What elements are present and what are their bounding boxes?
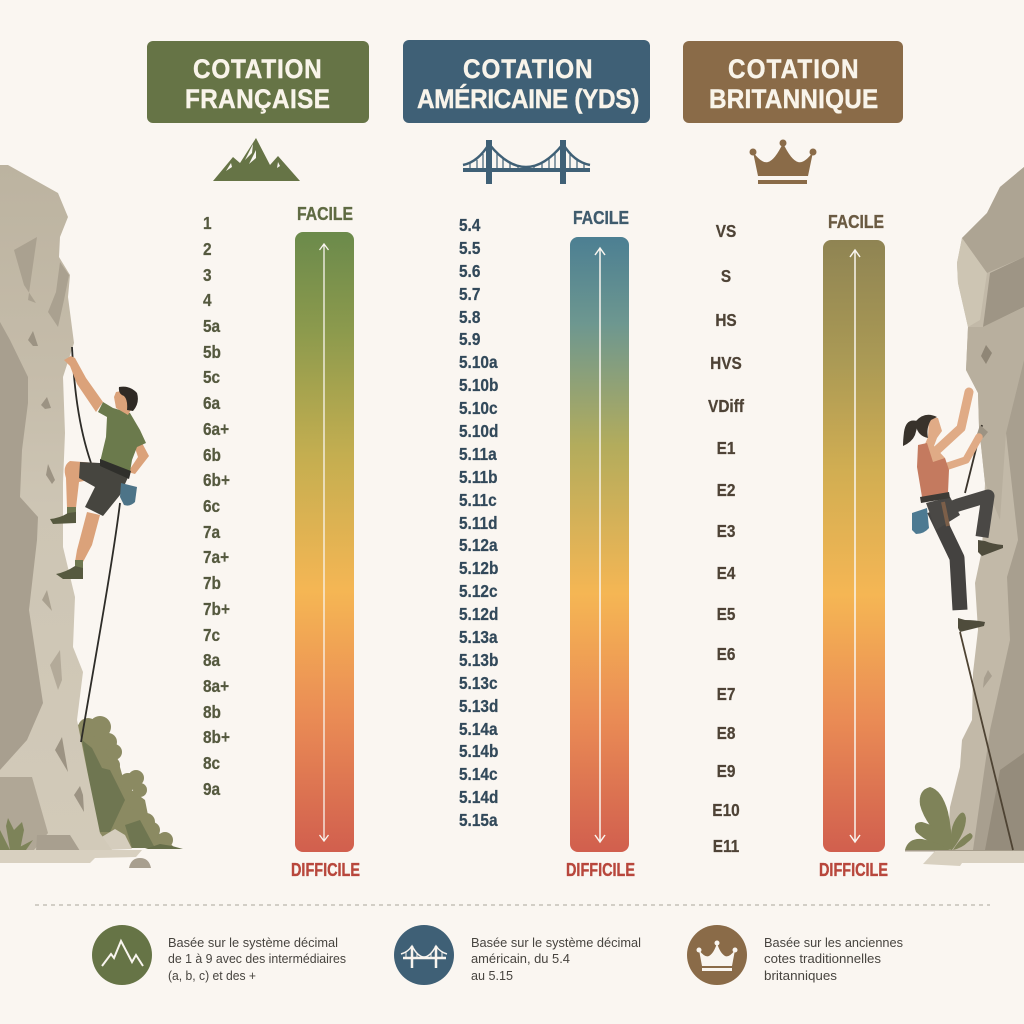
column: british grades: E7 — [717, 685, 735, 704]
column: french grades: 3 — [203, 266, 212, 285]
text: french note — [168, 935, 346, 983]
icon: mountain badge — [92, 925, 152, 985]
column: french grades: 4 — [203, 291, 212, 310]
text: british note: Basée sur les anciennes — [764, 935, 903, 950]
column: french grades: 1 — [203, 214, 212, 233]
column: american grades: 5.14c — [459, 765, 498, 784]
illustration: male climber — [50, 347, 149, 742]
column: french grades: 6b — [203, 446, 221, 465]
icon: crown badge — [687, 925, 747, 985]
column: british grades: E9 — [717, 762, 735, 781]
gradient bar: french — [295, 232, 354, 852]
column: american grades: 5.13a — [459, 628, 498, 647]
column: french grades: 7b — [203, 574, 221, 593]
column: british grades — [708, 222, 744, 856]
header: cotation américaine — [403, 40, 650, 123]
icon: crown — [750, 140, 816, 184]
column: american grades: 5.4 — [459, 216, 481, 235]
illustration: right ground — [905, 850, 1024, 866]
text: american note — [471, 935, 641, 983]
label: difficile british: DIFFICILE — [819, 860, 888, 880]
column: american grades: 5.10b — [459, 376, 498, 395]
column: american grades: 5.11a — [459, 445, 497, 464]
column: british grades: VDiff — [708, 397, 744, 416]
label: facile american: FACILE — [573, 208, 629, 228]
label: difficile french: DIFFICILE — [291, 860, 360, 880]
column: british grades: E1 — [717, 439, 735, 458]
column: british grades: E4 — [717, 564, 736, 583]
column: french grades: 5c — [203, 368, 220, 387]
column: american grades: 5.7 — [459, 285, 480, 304]
icon: bridge badge — [394, 925, 454, 985]
column: american grades: 5.14a — [459, 720, 498, 739]
column: french grades: 8c — [203, 754, 220, 773]
column: american grades: 5.5 — [459, 239, 480, 258]
column: french grades: 2 — [203, 240, 212, 259]
text: french note: Basée sur le système décimal — [168, 935, 338, 950]
column: french grades: 8b — [203, 703, 221, 722]
column: american grades: 5.12c — [459, 582, 498, 601]
header: cotation américaine: COTATION — [463, 55, 593, 84]
illustration: right cliff — [947, 167, 1024, 850]
column: french grades — [203, 214, 230, 799]
icon: bridge — [463, 140, 590, 184]
column: british grades: HVS — [710, 354, 742, 373]
footer: american note — [394, 925, 641, 985]
column: british grades: E6 — [717, 645, 735, 664]
text: british note: britanniques — [764, 968, 838, 983]
illustration: left bush — [77, 716, 183, 850]
column: american grades: 5.13b — [459, 651, 498, 670]
illustration: left cliff — [0, 165, 112, 851]
gradient bar: british — [823, 240, 885, 852]
column: american grades: 5.10a — [459, 353, 498, 372]
column: french grades: 7b+ — [203, 600, 230, 619]
text: british note: cotes traditionnelles — [764, 951, 882, 966]
column: british grades: VS — [716, 222, 736, 241]
column: american grades: 5.14d — [459, 788, 498, 807]
column: american grades: 5.13d — [459, 697, 498, 716]
illustration: right plant — [905, 787, 973, 850]
header: cotation française: COTATION — [193, 55, 322, 84]
column: american grades: 5.9 — [459, 330, 480, 349]
column: french grades: 6a+ — [203, 420, 229, 439]
column: american grades: 5.15a — [459, 811, 498, 830]
label: difficile american: DIFFICILE — [566, 860, 635, 880]
text: french note: (a, b, c) et des + — [168, 968, 256, 983]
column: french grades: 7a+ — [203, 548, 229, 567]
text: french note: de 1 à 9 avec des intermédiaires — [168, 951, 346, 966]
footer: british note — [687, 925, 903, 985]
column: british grades: HS — [715, 311, 737, 330]
column: french grades: 8b+ — [203, 728, 230, 747]
column: british grades: E10 — [712, 801, 740, 820]
header: cotation britannique: BRITANNIQUE — [709, 85, 878, 114]
column: american grades: 5.11c — [459, 491, 497, 510]
illustration: left ground — [0, 850, 151, 868]
illustration: female climber — [903, 392, 1013, 850]
text: american note: américain, du 5.4 — [471, 951, 570, 966]
text: american note: Basée sur le système décimal — [471, 935, 641, 950]
icon: mountain — [213, 138, 300, 181]
text: american note: au 5.15 — [471, 968, 513, 983]
column: french grades: 9a — [203, 780, 221, 799]
column: french grades: 7a — [203, 523, 221, 542]
column: american grades: 5.13c — [459, 674, 498, 693]
column: american grades: 5.11b — [459, 468, 498, 487]
column: british grades: E8 — [717, 724, 735, 743]
column: french grades: 8a — [203, 651, 221, 670]
label: facile french: FACILE — [297, 204, 353, 224]
column: french grades: 8a+ — [203, 677, 229, 696]
column: french grades: 6a — [203, 394, 221, 413]
footer: french note — [92, 925, 346, 985]
header: cotation américaine: AMÉRICAINE (YDS) — [417, 84, 639, 114]
column: french grades: 7c — [203, 626, 220, 645]
column: american grades: 5.6 — [459, 262, 480, 281]
column: british grades: S — [721, 267, 731, 286]
label: facile british: FACILE — [828, 212, 884, 232]
text: british note — [764, 935, 903, 983]
column: american grades: 5.14b — [459, 742, 498, 761]
column: american grades: 5.11d — [459, 514, 498, 533]
column: british grades: E11 — [713, 837, 739, 856]
column: american grades: 5.12a — [459, 536, 498, 555]
column: british grades: E5 — [717, 605, 735, 624]
gradient bar: american — [570, 237, 629, 852]
column: french grades: 6c — [203, 497, 220, 516]
column: american grades: 5.12d — [459, 605, 498, 624]
column: american grades: 5.10c — [459, 399, 498, 418]
column: british grades: E3 — [717, 522, 735, 541]
column: french grades: 5a — [203, 317, 221, 336]
column: british grades: E2 — [717, 481, 735, 500]
column: american grades — [459, 216, 498, 830]
column: american grades: 5.10d — [459, 422, 498, 441]
header: cotation britannique — [683, 41, 903, 123]
header: cotation française — [147, 41, 369, 123]
column: american grades: 5.12b — [459, 559, 498, 578]
column: french grades: 5b — [203, 343, 221, 362]
header: cotation britannique: COTATION — [728, 55, 859, 84]
header: cotation française: FRANÇAISE — [185, 85, 330, 114]
column: french grades: 6b+ — [203, 471, 230, 490]
column: american grades: 5.8 — [459, 308, 480, 327]
